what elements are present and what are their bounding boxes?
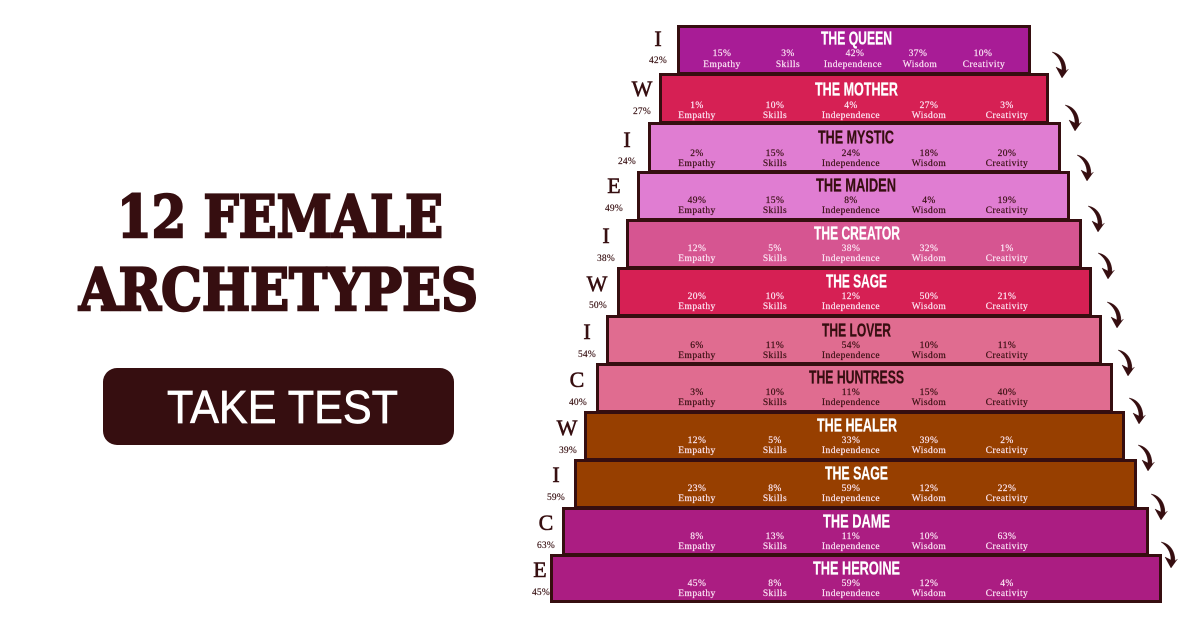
panel: the mother	[660, 74, 1048, 122]
panel: the healer: Skills	[763, 446, 787, 456]
title	[78, 183, 478, 324]
panel: the sage (brown): Skills	[763, 494, 787, 504]
side labels: letters and percentages: 27%	[633, 107, 651, 117]
panel: the mystic: 24%	[842, 149, 860, 159]
panel: the maiden: THE MAIDEN	[816, 176, 896, 196]
panel: the creator	[628, 220, 1080, 268]
panel: the creator: Empathy	[678, 254, 716, 264]
panel: the maiden: Wisdom	[912, 206, 946, 216]
panel: the mystic: Independence	[822, 159, 880, 169]
panel: the lover	[608, 316, 1100, 364]
panel: the heroine: 8%	[768, 579, 782, 589]
panel: the maiden: 8%	[844, 196, 858, 206]
panel: the mother: 3%	[1000, 101, 1014, 111]
panel: the lover: Creativity	[986, 351, 1028, 361]
panel: the dame: Skills	[763, 542, 787, 552]
panel: the creator: THE CREATOR	[814, 224, 900, 244]
panel: the huntress: 11%	[842, 388, 860, 398]
panel: the healer	[586, 412, 1124, 460]
panel: the dame: 11%	[842, 532, 860, 542]
side labels: letters and percentages: I	[583, 319, 591, 344]
panel: the sage (brown): 8%	[768, 484, 782, 494]
panel: the healer: 5%	[768, 436, 782, 446]
panel: the dame: Creativity	[986, 542, 1028, 552]
panel: the creator: 5%	[768, 244, 782, 254]
panel: the queen: 3%	[781, 49, 795, 59]
panel: the dame: Independence	[822, 542, 880, 552]
panel: the heroine: 12%	[920, 579, 938, 589]
side labels: letters and percentages: 40%	[569, 398, 587, 408]
panel: the sage (crimson): Independence	[822, 302, 880, 312]
panel: the dame: Empathy	[678, 542, 716, 552]
panel: the huntress: Creativity	[986, 398, 1028, 408]
panel: the queen	[678, 26, 1030, 74]
panel: the lover: Wisdom	[912, 351, 946, 361]
panel: the maiden: Skills	[763, 206, 787, 216]
panel: the heroine: Empathy	[678, 589, 716, 599]
panel: the queen: 37%	[909, 49, 927, 59]
panel: the sage (crimson): Empathy	[678, 302, 716, 312]
panel: the mother: 10%	[766, 101, 784, 111]
panel: the mystic: 20%	[998, 149, 1016, 159]
panel: the lover: Empathy	[678, 351, 716, 361]
panel: the dame: Wisdom	[912, 542, 946, 552]
panel: the heroine: Creativity	[986, 589, 1028, 599]
panel: the queen: 42%	[846, 49, 864, 59]
panel: the lover: Skills	[763, 351, 787, 361]
panel: the sage (brown): Empathy	[678, 494, 716, 504]
side labels: letters and percentages: I	[654, 26, 662, 51]
panel: the creator: Skills	[763, 254, 787, 264]
panel: the dame: THE DAME	[823, 512, 890, 532]
panel: the lover: 11%	[766, 341, 784, 351]
panel: the huntress: 10%	[766, 388, 784, 398]
panel: the healer: 39%	[920, 436, 938, 446]
button: take test: TAKE TEST	[167, 381, 398, 433]
panel: the maiden: 49%	[688, 196, 706, 206]
panel: the maiden: 19%	[998, 196, 1016, 206]
panel: the lover: 6%	[690, 341, 704, 351]
panel: the huntress: Empathy	[678, 398, 716, 408]
button: take test	[103, 368, 454, 445]
panel: the sage (brown): Creativity	[986, 494, 1028, 504]
panel: the mother: Empathy	[678, 111, 716, 121]
side labels: letters and percentages	[532, 26, 667, 598]
panel: the healer: THE HEALER	[817, 416, 897, 436]
panel: the mother: 27%	[920, 101, 938, 111]
side labels: letters and percentages: E	[533, 557, 547, 582]
panel: the sage (crimson): 21%	[998, 292, 1016, 302]
panel: the heroine: Independence	[822, 589, 880, 599]
arrows between levels	[1052, 52, 1178, 568]
panel: the mystic: THE MYSTIC	[818, 128, 894, 148]
panel: the sage (brown): Wisdom	[912, 494, 946, 504]
panel: the mother: 1%	[690, 101, 704, 111]
panel: the queen: Creativity	[963, 60, 1005, 70]
panel: the maiden: Empathy	[678, 206, 716, 216]
panel: the huntress: 3%	[690, 388, 704, 398]
panel: the mother: Wisdom	[912, 111, 946, 121]
panel: the maiden	[638, 172, 1068, 220]
panel: the mother: Skills	[763, 111, 787, 121]
side labels: letters and percentages: 63%	[537, 541, 555, 551]
panel: the mystic: Creativity	[986, 159, 1028, 169]
side labels: letters and percentages: W	[587, 271, 608, 296]
panel: the creator: 38%	[842, 244, 860, 254]
panel: the creator: 12%	[688, 244, 706, 254]
panel: the mother: THE MOTHER	[815, 80, 898, 100]
side labels: letters and percentages: 38%	[597, 254, 615, 264]
panel: the lover: THE LOVER	[822, 320, 891, 340]
panel: the huntress: THE HUNTRESS	[809, 368, 904, 388]
side labels: letters and percentages: W	[632, 76, 653, 101]
side labels: letters and percentages: 49%	[605, 204, 623, 214]
panel: the creator: Independence	[822, 254, 880, 264]
side labels: letters and percentages: 42%	[649, 56, 667, 66]
side labels: letters and percentages: 39%	[559, 446, 577, 456]
side labels: letters and percentages: I	[552, 462, 560, 487]
panel: the heroine: Skills	[763, 589, 787, 599]
title: 12 FEMALE	[117, 183, 443, 251]
panel: the healer: Independence	[822, 446, 880, 456]
side labels: letters and percentages: C	[539, 510, 553, 535]
panel: the lover: 11%	[998, 341, 1016, 351]
panel: the heroine: Wisdom	[912, 589, 946, 599]
panel: the huntress: Skills	[763, 398, 787, 408]
panel: the mother: 4%	[844, 101, 858, 111]
panel: the heroine: THE HEROINE	[813, 558, 900, 578]
panel: the queen: Empathy	[703, 60, 741, 70]
panel: the huntress: 15%	[920, 388, 938, 398]
panel: the queen: 15%	[713, 49, 731, 59]
panel: the huntress: Independence	[822, 398, 880, 408]
panel: the dame	[564, 508, 1148, 554]
panel: the queen: THE QUEEN	[821, 28, 892, 48]
panel: the creator: 1%	[1000, 244, 1014, 254]
panel: the sage (brown)	[576, 460, 1136, 508]
side labels: letters and percentages: 54%	[578, 350, 596, 360]
title: ARCHETYPES	[78, 256, 478, 324]
panel: the sage (crimson)	[618, 268, 1090, 316]
side labels: letters and percentages: 59%	[547, 493, 565, 503]
side labels: letters and percentages: I	[623, 127, 631, 152]
side labels: letters and percentages: 45%	[532, 588, 550, 598]
panel: the heroine: 4%	[1000, 579, 1014, 589]
panel: the sage (brown): 59%	[842, 484, 860, 494]
panel: the huntress: Wisdom	[912, 398, 946, 408]
panel: the mystic: 18%	[920, 149, 938, 159]
panel: the healer: 33%	[842, 436, 860, 446]
panel: the sage (brown): Independence	[822, 494, 880, 504]
side labels: letters and percentages: E	[607, 173, 621, 198]
panel: the mother: Creativity	[986, 111, 1028, 121]
panel: the healer: 2%	[1000, 436, 1014, 446]
panel: the sage (crimson): THE SAGE	[826, 272, 887, 292]
panel: the maiden: Creativity	[986, 206, 1028, 216]
panel: the queen: Independence	[824, 60, 882, 70]
panel: the dame: 8%	[690, 532, 704, 542]
side labels: letters and percentages: W	[557, 415, 578, 440]
panel: the sage (brown): THE SAGE	[825, 464, 888, 484]
panel: the heroine: 45%	[688, 579, 706, 589]
panel: the lover: Independence	[822, 351, 880, 361]
panel: the sage (brown): 23%	[688, 484, 706, 494]
panel: the healer: Creativity	[986, 446, 1028, 456]
panel: the healer: 12%	[688, 436, 706, 446]
panel: the sage (crimson): Creativity	[986, 302, 1028, 312]
panel: the huntress: 40%	[998, 388, 1016, 398]
panel: the mother: Independence	[822, 111, 880, 121]
panel: the maiden: 15%	[766, 196, 784, 206]
side labels: letters and percentages: 24%	[618, 157, 636, 167]
panel: the healer: Wisdom	[912, 446, 946, 456]
panel: the maiden: 4%	[922, 196, 936, 206]
panel: the queen: Wisdom	[903, 60, 937, 70]
panel: the sage (crimson): 10%	[766, 292, 784, 302]
panel: the maiden: Independence	[822, 206, 880, 216]
panel: the dame: 13%	[766, 532, 784, 542]
panel: the mystic: 2%	[690, 149, 704, 159]
panel: the sage (brown): 22%	[998, 484, 1016, 494]
side labels: letters and percentages: I	[602, 223, 610, 248]
panel: the lover: 54%	[842, 341, 860, 351]
side labels: letters and percentages: C	[570, 367, 584, 392]
panel: the sage (crimson): 12%	[842, 292, 860, 302]
panel: the heroine	[552, 556, 1160, 602]
panel: the sage (crimson): 20%	[688, 292, 706, 302]
panel: the queen: Skills	[776, 60, 800, 70]
panel: the sage (crimson): Skills	[763, 302, 787, 312]
panel: the sage (brown): 12%	[920, 484, 938, 494]
panel: the heroine: 59%	[842, 579, 860, 589]
panel: the huntress	[598, 364, 1112, 412]
panel: the healer: Empathy	[678, 446, 716, 456]
panel: the mystic	[650, 124, 1060, 172]
panel: the sage (crimson): 50%	[920, 292, 938, 302]
panel: the sage (crimson): Wisdom	[912, 302, 946, 312]
panel: the mystic: Skills	[763, 159, 787, 169]
side labels: letters and percentages: 50%	[589, 301, 607, 311]
panel: the creator: 32%	[920, 244, 938, 254]
panel: the dame: 63%	[998, 532, 1016, 542]
panel: the mystic: Wisdom	[912, 159, 946, 169]
panel: the lover: 10%	[920, 341, 938, 351]
panel: the queen: 10%	[974, 49, 992, 59]
panel: the dame: 10%	[920, 532, 938, 542]
panel: the creator: Creativity	[986, 254, 1028, 264]
panel: the creator: Wisdom	[912, 254, 946, 264]
panel: the mystic: Empathy	[678, 159, 716, 169]
panel: the mystic: 15%	[766, 149, 784, 159]
